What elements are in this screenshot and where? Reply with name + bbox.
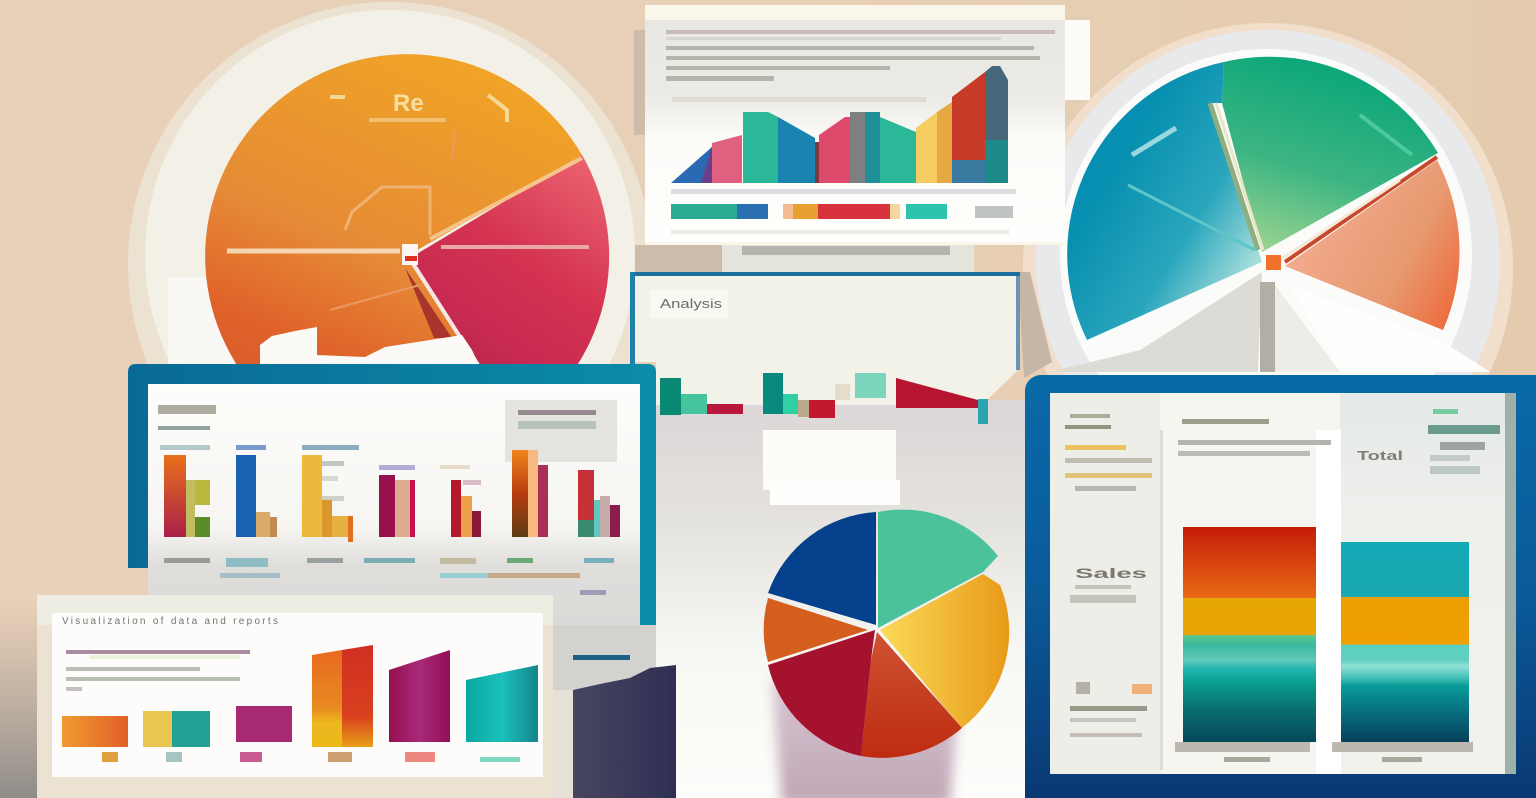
centre pie chart <box>764 510 1009 798</box>
pie label: Re <box>393 90 424 117</box>
bar group 2 <box>236 445 277 537</box>
axis line <box>671 189 1016 194</box>
pie highlight lines <box>227 95 589 365</box>
bar group 7 <box>578 470 620 537</box>
right column text <box>1357 409 1500 474</box>
stacked bar 2 <box>1341 542 1469 742</box>
stacked bar 1 <box>1183 527 1316 742</box>
pie shadow <box>772 680 958 798</box>
category labels <box>164 558 614 595</box>
grey backing behind panels <box>552 600 656 700</box>
middle column text <box>1178 419 1331 456</box>
bar group 1 <box>160 445 210 537</box>
top report document <box>645 5 1090 245</box>
navy base <box>573 665 676 798</box>
centre panel: Analysis <box>660 296 723 311</box>
title lines <box>158 405 216 414</box>
centre column background <box>656 400 1026 798</box>
bottom-left panel <box>37 595 553 798</box>
right pie chart <box>1023 23 1513 513</box>
bar group 6 <box>512 450 548 537</box>
area bar chart <box>671 66 1008 183</box>
text lines <box>66 650 250 654</box>
bar labels <box>102 752 520 762</box>
panel heading: Visualization of data and reports <box>62 616 278 627</box>
header text lines <box>666 30 1055 102</box>
panel title <box>650 290 728 318</box>
left pie chart <box>128 2 645 364</box>
small bars <box>660 373 988 424</box>
right panel <box>1025 375 1536 798</box>
tan strip under document <box>635 245 974 272</box>
colour legend strip <box>671 204 1013 219</box>
white base <box>1050 272 1262 372</box>
right column text: Total <box>1357 448 1403 463</box>
brown edge beside document <box>634 30 646 135</box>
bar group 3 <box>302 445 359 542</box>
bar group 4 <box>379 465 415 537</box>
bar group 5 <box>440 465 481 537</box>
bars <box>62 645 538 747</box>
left column text: Sales <box>1075 565 1147 581</box>
centre panel <box>630 272 1052 424</box>
left panel <box>128 364 656 625</box>
left column text <box>1065 414 1152 737</box>
stacked bar labels <box>1175 742 1473 762</box>
white cloud <box>260 327 480 367</box>
